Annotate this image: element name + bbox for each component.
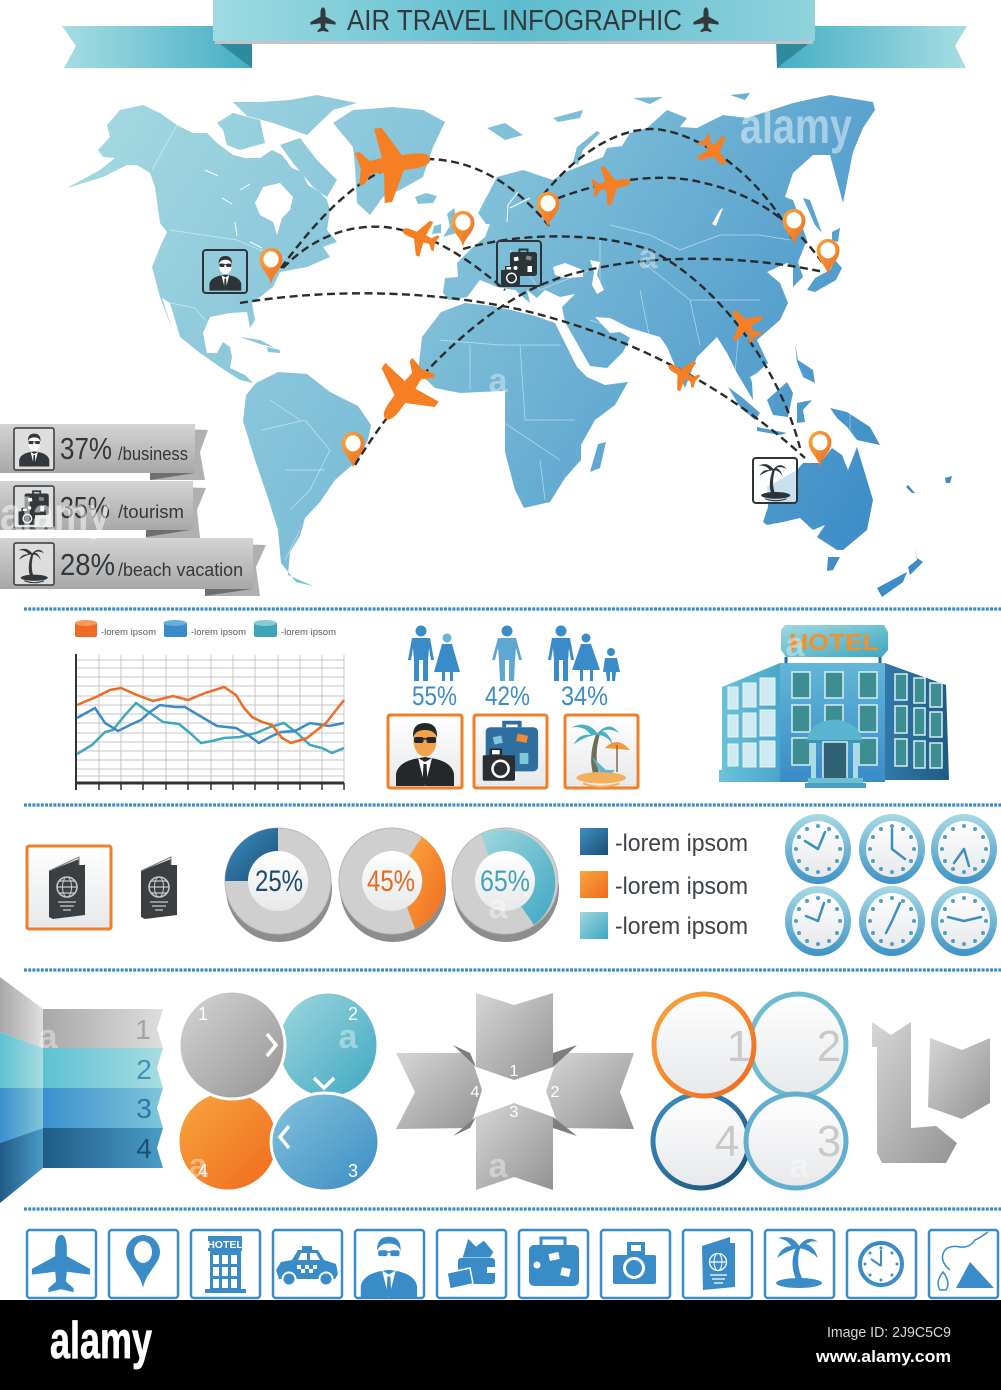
donut 65 percent: 65%: [480, 865, 530, 898]
watermark letters: a: [489, 362, 509, 400]
watermark letters: a: [39, 1018, 59, 1056]
folded arrow right: [928, 1038, 990, 1119]
arrow 2 right: [546, 1053, 634, 1129]
series: teal: [77, 703, 344, 754]
four step circles: 1: [198, 1004, 208, 1024]
icon: passport small: [141, 857, 177, 919]
stat: business: [0, 424, 208, 480]
stat banners: [0, 424, 266, 596]
continent: North America: [67, 105, 337, 383]
person group: single: [485, 626, 530, 711]
person group: family: 34%: [561, 681, 608, 711]
planes on routes: [352, 122, 770, 438]
four step circles: 4: [198, 1161, 208, 1181]
arrow cross diagram: 1: [510, 1063, 519, 1080]
route: Brazil to Japan: [355, 259, 824, 465]
route: USA to Australia: [240, 293, 805, 458]
donut legend: -lorem ipsom: [615, 830, 748, 857]
ring 1: [654, 994, 754, 1096]
title text: AIR TRAVEL INFOGRAPHIC: [347, 5, 682, 37]
Canadian arctic islands: [217, 95, 357, 197]
ribbon 4: 4: [136, 1133, 152, 1164]
alamy logo: alamy: [50, 1312, 152, 1370]
arrow cross diagram: 3: [510, 1104, 519, 1121]
clock 2: [859, 814, 925, 884]
donut charts: [225, 828, 559, 942]
pin west Europe: [452, 211, 474, 247]
stat: beach vacation: /beach vacation: [118, 560, 243, 580]
person group: couple: [408, 626, 460, 711]
icon: businessman: [355, 1230, 424, 1298]
website: www.alamy.com: [815, 1347, 951, 1366]
donut 25 percent: [225, 828, 332, 942]
series: orange: [77, 687, 344, 743]
clock 3: [931, 814, 997, 884]
map pins: [260, 192, 839, 468]
clocks: [785, 814, 997, 956]
icon: plane: [27, 1230, 96, 1298]
donut 65 percent: [452, 828, 559, 942]
stat: business: 37%: [60, 431, 112, 466]
ribbon 4: [0, 1128, 163, 1203]
ring circles: 3: [817, 1117, 841, 1166]
step circle 2: [278, 992, 378, 1098]
framed icon: beach: [565, 715, 638, 788]
icon: tent and campfire: [929, 1230, 998, 1298]
arrow 4 left: [396, 1053, 482, 1129]
line chart: [75, 620, 344, 790]
arrow 1 top: [476, 993, 553, 1080]
plane china: [720, 300, 770, 350]
clock 6: [931, 886, 997, 956]
Tasmania and New Zealand: [827, 476, 952, 597]
ring 3: [746, 1094, 846, 1188]
route: Europe to Korea north: [543, 129, 792, 238]
watermark letters: a: [786, 626, 806, 664]
hotel sign: [781, 625, 888, 664]
stat: tourism: [0, 481, 206, 538]
ribbon 1: 1: [135, 1014, 151, 1045]
pin Korea: [783, 209, 805, 245]
plane atlantic small: [396, 213, 444, 261]
Cuba and Caribbean: [240, 337, 280, 353]
clock 1: [785, 814, 851, 884]
clock 4: [785, 886, 851, 956]
map marker: tourism: [497, 241, 541, 286]
continent: Australia: [763, 447, 873, 550]
continent: Eurasia: [443, 95, 875, 400]
Greenland: [333, 107, 445, 215]
folded gray arrows: [872, 1022, 990, 1163]
icon: passport: [683, 1230, 752, 1298]
continent: Africa: [418, 303, 628, 508]
world map: [67, 93, 952, 597]
step circle 3: [271, 1093, 379, 1191]
ring circles: 4: [715, 1117, 739, 1166]
donut 45 percent: 45%: [367, 865, 415, 898]
hotel porch and door: [805, 720, 866, 788]
Iceland: [415, 193, 437, 204]
plane india: [660, 351, 705, 396]
four step circles: 3: [348, 1161, 358, 1181]
pin Brazil: [342, 432, 364, 468]
framed icon: businessman: [388, 715, 462, 788]
chart legend: [75, 620, 336, 638]
chart legend: -lorem ipsom: [191, 627, 246, 638]
clock 5: [859, 886, 925, 956]
plane russia east: [690, 127, 739, 176]
icon: camera: [601, 1230, 670, 1298]
pin New York: [260, 248, 282, 284]
ribbon right tail: [775, 26, 967, 68]
Madagascar: [590, 442, 606, 472]
framed icon: luggage and camera: [474, 715, 547, 788]
people statistics: [408, 626, 620, 711]
donut legend: -lorem ipsom: [615, 913, 748, 940]
hotel wings and facade: [719, 663, 780, 782]
stat: beach vacation: [0, 538, 266, 596]
arrow cross diagram: 2: [551, 1084, 560, 1101]
watermark: alamy map: alamy: [740, 98, 852, 154]
ring 2: [750, 994, 846, 1096]
Southeast Asian islands: [728, 343, 880, 445]
icon: hotel: HOTEL: [207, 1239, 243, 1251]
icon: pin: [109, 1230, 178, 1298]
icon: taxi: [273, 1230, 342, 1298]
watermark letters: a: [189, 1147, 209, 1185]
ring circles: 1: [727, 1022, 751, 1071]
four step circles: [178, 991, 379, 1191]
chart legend: -lorem ipsom: [281, 627, 336, 638]
arrow cross diagram: [396, 993, 634, 1190]
pin Moscow: [537, 192, 559, 228]
ring circles: [653, 994, 846, 1188]
icon: wallet: [437, 1230, 506, 1298]
footer band: [0, 1300, 1001, 1390]
ribbon stack options: [0, 977, 163, 1203]
watermark: alamy banner: alamy: [0, 488, 110, 540]
four step circles: 2: [348, 1004, 358, 1024]
plane large south: [359, 347, 450, 438]
framed icon: passport: [27, 846, 111, 929]
ribbon 1: [0, 977, 163, 1048]
pin Australia: [809, 431, 831, 467]
stat: tourism: /tourism: [118, 502, 184, 522]
arrow cross diagram: 4: [471, 1084, 480, 1101]
icon: clock: [847, 1230, 916, 1298]
ribbon left tail: [62, 26, 252, 68]
route: Europe to Japan: [546, 178, 822, 262]
icon: title plane left: [310, 7, 336, 32]
stat: business: /business: [118, 444, 188, 464]
stat: beach vacation: 28%: [60, 547, 115, 582]
route: New York to Europe south: [283, 227, 505, 290]
donut legend: [580, 828, 748, 940]
arrow 3 bottom: [476, 1103, 553, 1190]
watermark letters: a: [489, 1147, 509, 1185]
title ribbon: [62, 0, 967, 68]
British Isles: [432, 208, 460, 237]
plane russia west: [589, 162, 634, 207]
watermark letters: a: [790, 1147, 810, 1185]
icon: hotel: [191, 1230, 260, 1298]
folded arrow left: [872, 1022, 957, 1163]
series: blue: [77, 705, 344, 743]
watermark letters: a: [339, 1018, 359, 1056]
icon row: [27, 1230, 998, 1298]
icon: suitcase: [519, 1230, 588, 1298]
watermark letters: a: [489, 888, 509, 926]
map marker: business: [203, 250, 247, 293]
person group: single: 42%: [485, 681, 530, 711]
pin Japan: [817, 239, 839, 275]
watermark letters: [39, 238, 810, 1185]
donut legend: -lorem ipsom: [615, 873, 748, 900]
ribbon 3: 3: [136, 1093, 152, 1124]
watermark letters: a: [639, 238, 659, 276]
inland water and seas: [255, 183, 723, 294]
person group: family: [548, 626, 620, 711]
route: New York to Europe north: [281, 159, 549, 268]
donut 25 percent: 25%: [255, 865, 303, 898]
ribbon 2: [0, 1032, 163, 1088]
icon: palm island: [765, 1230, 834, 1298]
route: Europe to Australia: [463, 236, 800, 448]
ring 4: [653, 1094, 749, 1188]
Arctic islands of Eurasia: [487, 93, 750, 165]
stat: tourism: 35%: [60, 490, 110, 525]
Sakhalin and Japan: [803, 198, 842, 292]
map marker: beach: [753, 458, 797, 503]
hotel sign: HOTEL: [789, 629, 879, 655]
image id: Image ID: 2J9C5C9: [827, 1324, 951, 1341]
hotel building: [719, 625, 949, 788]
person group: couple: 55%: [412, 681, 457, 711]
ribbon centre band: [213, 0, 815, 41]
ribbon 2: 2: [136, 1054, 152, 1085]
step circle 4: [178, 1091, 278, 1191]
step circle 1: [179, 991, 285, 1099]
donut 45 percent: [339, 828, 446, 942]
chart legend: -lorem ipsom: [101, 627, 156, 638]
flight routes: [240, 129, 824, 465]
plane large north: [352, 122, 435, 206]
country borders: [152, 125, 850, 560]
continent: South America: [243, 372, 371, 586]
ring circles: 2: [817, 1022, 841, 1071]
ribbon 3: [0, 1088, 163, 1143]
icon: title plane right: [693, 7, 719, 32]
